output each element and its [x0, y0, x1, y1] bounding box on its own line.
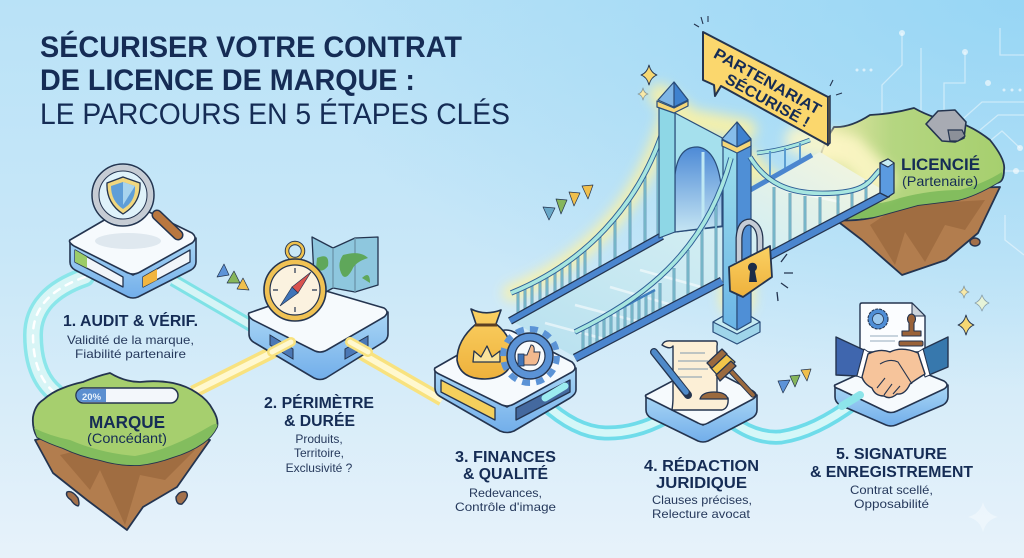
label: licencié: LICENCIÉ [901, 155, 980, 174]
icon: magnifier and shield [92, 164, 178, 235]
connector: cyan path step 3 to step 4 [543, 402, 666, 433]
icon: padlock [729, 222, 793, 301]
connector: cyan path step 4 to step 5 [733, 402, 855, 437]
step 4: platform [646, 341, 757, 442]
step 2: text: 2. PÉRIMÈTRE [264, 395, 374, 412]
step 5: text: Contrat scellé, [850, 483, 933, 497]
near railing and cables [575, 157, 888, 358]
icon: compass [264, 243, 326, 321]
label: marque [87, 412, 167, 446]
label: licencié [901, 155, 980, 189]
step 4: text [644, 458, 759, 521]
step 4: text: Clauses précises, [652, 493, 752, 507]
arrow chevrons 2 [543, 185, 593, 220]
step 5: text: Opposabilité [854, 497, 929, 511]
step 3: text [455, 449, 556, 514]
step 1: platform [70, 164, 196, 298]
far railing [511, 118, 810, 316]
step 2: text [264, 395, 374, 475]
icon: stone [926, 110, 966, 142]
step 2: text: Territoire, [294, 446, 344, 460]
icon: pen [654, 352, 688, 395]
step 3: text: Contrôle d'image [455, 500, 556, 514]
island: licencié [817, 108, 1004, 275]
icon: scroll [662, 341, 728, 410]
step 2: platform [248, 237, 388, 380]
yellow beam ends [272, 342, 368, 352]
connector: cyan path island to step 1 [33, 277, 85, 393]
icon: map [312, 237, 378, 298]
step 3: text: 3. FINANCES [455, 449, 556, 466]
near tower [713, 122, 760, 344]
connector: yellow beam island to step 2 [193, 345, 287, 392]
title: SÉCURISER VOTRE CONTRAT [40, 30, 462, 64]
step 1: text: Validité de la marque, [67, 333, 194, 347]
icon: handshake [836, 337, 948, 398]
watermark sparkle [968, 502, 998, 532]
step 5: text [810, 446, 974, 511]
sparkles [638, 65, 989, 335]
step 2: text: & DURÉE [284, 413, 355, 430]
arrow chevrons 1 [217, 264, 249, 290]
step 2: text: Exclusivité ? [286, 461, 353, 475]
arrow chevrons 3 [778, 369, 811, 393]
step 4: text: Relecture avocat [652, 507, 751, 521]
progress bar: 20% [76, 388, 178, 403]
connector: cyan path step 1 to step 2 [173, 280, 252, 326]
step 2: text: Produits, [295, 432, 343, 446]
bridge [510, 82, 894, 358]
icon: certificate document [860, 303, 925, 352]
icon: money bag with crown [457, 309, 513, 379]
step 1: text: Fiabilité partenaire [75, 347, 186, 361]
step 4: text: 4. RÉDACTION [644, 458, 759, 475]
sign: partenariat sécurisé: PARTENARIAT [711, 46, 824, 119]
label: marque: (Concédant) [87, 430, 167, 446]
label: licencié: (Partenaire) [902, 173, 978, 189]
step 5: platform [834, 303, 948, 426]
icon: gavel [700, 349, 753, 399]
title: DE LICENCE DE MARQUE : [40, 64, 415, 97]
step 5: text: 5. SIGNATURE [836, 446, 947, 463]
step 3: text: Redevances, [469, 486, 542, 500]
sign: partenariat sécurisé [694, 16, 842, 145]
connector: yellow beam step 2 to step 3 [350, 347, 442, 400]
step 4: text: JURIDIQUE [656, 475, 747, 492]
step 5: text: & ENREGISTREMENT [810, 464, 974, 481]
title [40, 30, 510, 131]
step 1: text [63, 313, 198, 361]
far tower [657, 82, 728, 238]
label: marque: MARQUE [89, 412, 165, 432]
sign: partenariat sécurisé: SÉCURISÉ ! [722, 71, 812, 131]
title: LE PARCOURS EN 5 ÉTAPES CLÉS [40, 98, 510, 131]
step 3: platform [434, 309, 576, 432]
progress bar: 20%: 20% [82, 392, 102, 403]
island: marque [33, 373, 218, 530]
step 1: text: 1. AUDIT & VÉRIF. [63, 313, 198, 330]
icon: gear with thumb up [503, 329, 557, 383]
deck [510, 152, 888, 357]
step 3: text: & QUALITÉ [463, 466, 548, 483]
